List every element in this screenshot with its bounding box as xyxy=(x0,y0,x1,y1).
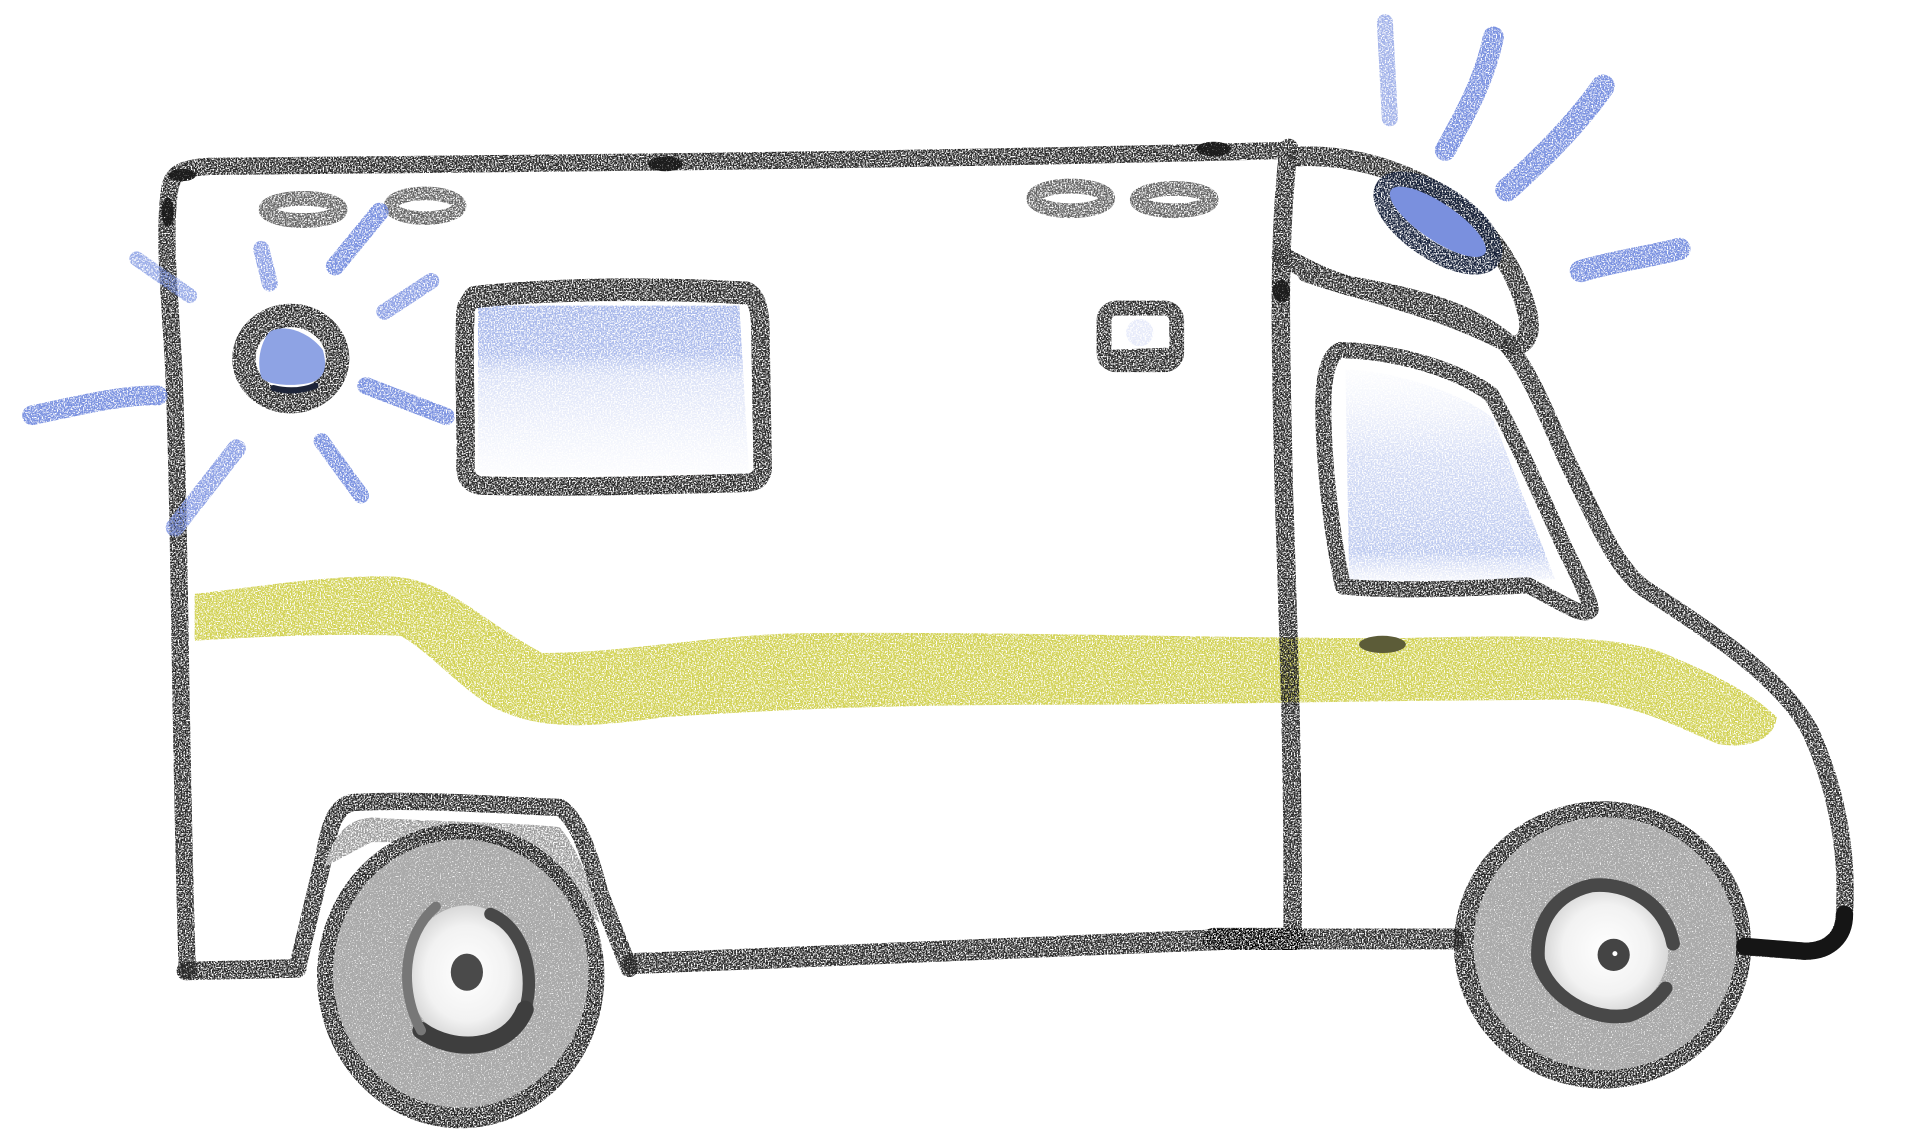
rear wheel disc xyxy=(327,833,594,1118)
stripe: yellow side band xyxy=(195,576,1777,745)
door handle xyxy=(1359,636,1406,653)
rear beacon light xyxy=(244,315,338,402)
front wheel ring xyxy=(1538,885,1673,1016)
outline: van body xyxy=(167,148,1845,971)
rays: rear beacon flash xyxy=(32,212,446,527)
dark pressure spots on the outline xyxy=(161,142,1290,302)
wheel: rear tyre and hub xyxy=(186,801,629,1118)
outline: cab roof and light housing xyxy=(1281,156,1529,345)
cab beacon light xyxy=(1370,165,1506,281)
bumper shadow xyxy=(1745,914,1845,951)
front wheel axle xyxy=(1598,939,1630,971)
wheel: front tyre and hub xyxy=(1464,811,1741,1079)
window: cab door window frame xyxy=(1323,350,1591,612)
rear wheel ring xyxy=(407,907,529,1045)
small square hatch xyxy=(1104,308,1177,365)
window: rear side window frame xyxy=(465,288,763,487)
window wash: blue tints xyxy=(478,306,1555,584)
rear wheel axle xyxy=(451,954,483,991)
vents: roof markers xyxy=(266,186,1211,221)
rays: cab beacon flash xyxy=(1385,22,1679,271)
rear wheel arch xyxy=(186,801,629,971)
